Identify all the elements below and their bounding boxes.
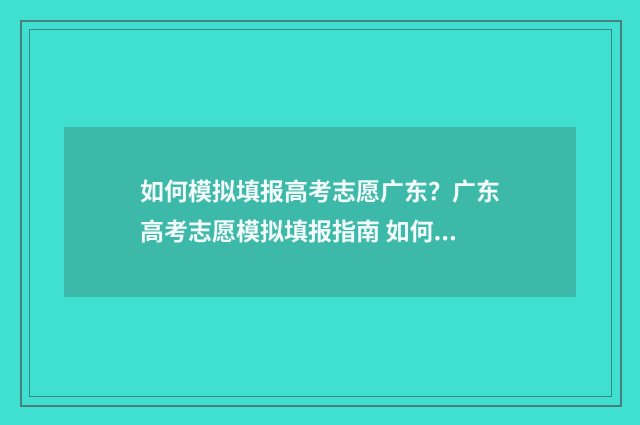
title (140, 172, 500, 247)
title: 如何模拟填报高考志愿广东？广东 (140, 172, 500, 207)
inner frame (29, 29, 612, 397)
title: 高考志愿模拟填报指南 如何... (140, 212, 457, 247)
panel: title background (64, 127, 576, 297)
